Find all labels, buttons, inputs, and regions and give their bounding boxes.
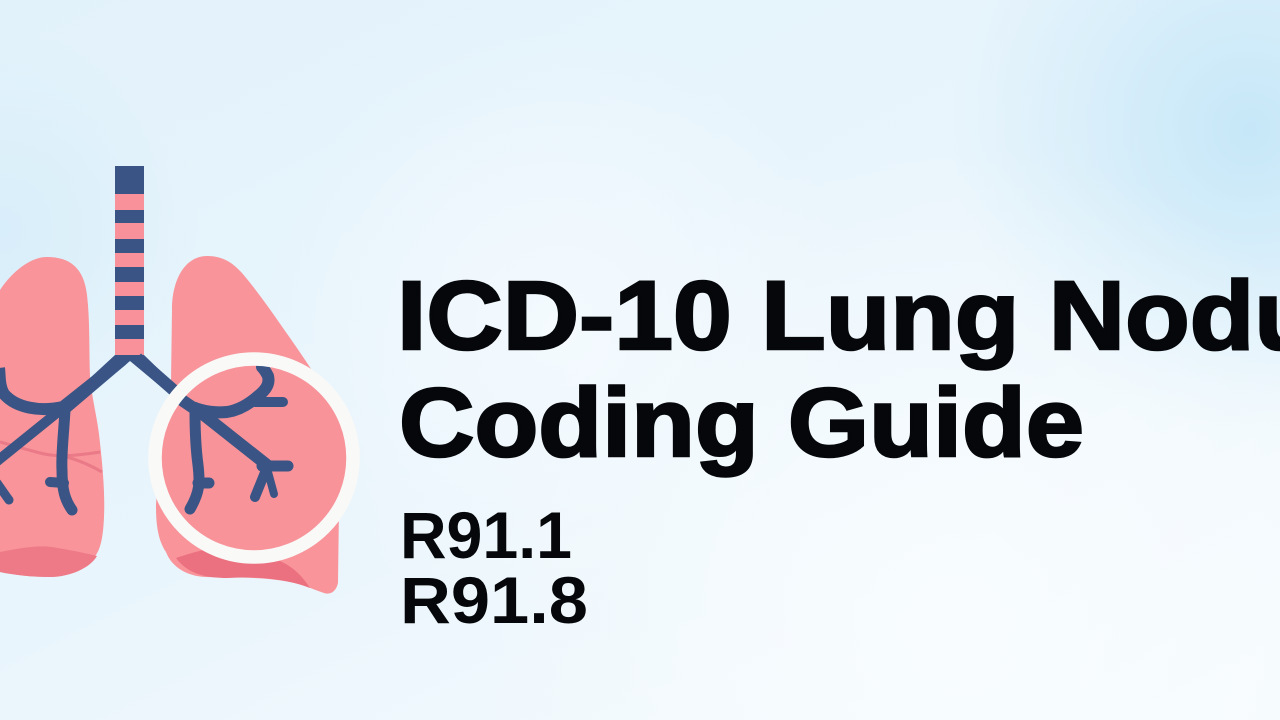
left lung <box>0 257 104 577</box>
right lung <box>156 256 340 594</box>
codes: R91.1 <box>400 498 572 572</box>
title <box>397 261 1280 477</box>
codes <box>400 498 588 637</box>
lungs illustration <box>0 166 353 594</box>
magnifier inner <box>162 366 346 549</box>
title: Coding Guide <box>399 368 1084 477</box>
magnifier ring <box>155 359 353 557</box>
bronchi left <box>0 360 122 510</box>
codes: R91.8 <box>400 563 588 637</box>
branches inside magnifier <box>170 367 288 509</box>
trachea fork <box>70 355 162 412</box>
bronchi right <box>140 354 178 394</box>
trachea <box>115 166 144 356</box>
